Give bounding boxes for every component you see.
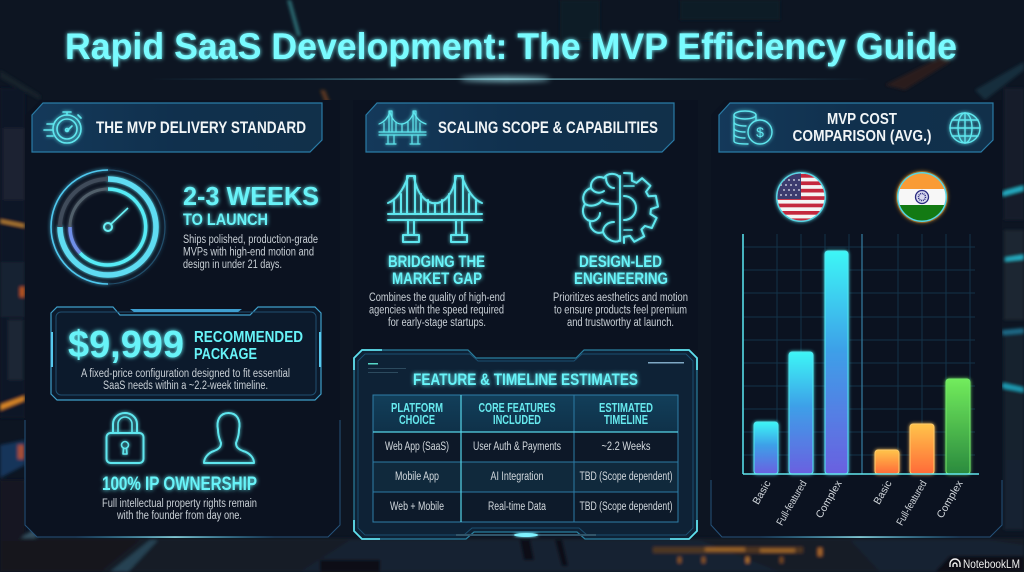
icon: USA flag [776, 172, 826, 222]
stat: 2-3 weeks to launch: MVPs with high-end motion and [183, 246, 314, 258]
feature: bridging the market gap: agencies with the speed required [369, 304, 504, 316]
table: feature and timeline estimates [373, 395, 678, 522]
table rows: Real-time Data [488, 501, 546, 513]
panel: feature and timeline estimates: FEATURE & TIMELINE ESTIMATES [413, 370, 638, 389]
table header: CHOICE [399, 413, 435, 427]
icon: person silhouette [204, 413, 254, 463]
feature: IP ownership: Full intellectual property rights remain [102, 498, 257, 510]
axis labels: Complex [813, 478, 845, 520]
icon: suspension bridge [388, 176, 482, 242]
stat: 2-3 weeks to launch: Ships polished, production-grade [183, 234, 318, 246]
icon: brain and gear [583, 173, 658, 243]
icon: small bridge [379, 111, 426, 144]
table rows [385, 441, 673, 513]
table header [391, 401, 653, 427]
table header: INCLUDED [493, 413, 541, 427]
axis labels [750, 478, 966, 528]
feature: bridging the market gap [369, 252, 505, 329]
section header: delivery standard [32, 103, 322, 152]
stat: 2-3 weeks to launch [183, 181, 319, 271]
callout: recommended package: RECOMMENDED [194, 329, 303, 346]
feature: design-led engineering: ENGINEERING [574, 269, 668, 288]
table rows: AI Integration [490, 471, 544, 483]
title: Rapid SaaS Development: The MVP Efficiency Guide [65, 26, 957, 67]
section header: cost comparison [719, 103, 993, 152]
icon: stopwatch [44, 112, 81, 143]
table rows: Web + Mobile [390, 501, 444, 513]
feature: IP ownership [102, 474, 257, 522]
table rows: TBD (Scope dependent) [580, 471, 673, 483]
table rows: ~2.2 Weeks [602, 441, 651, 453]
section header: scaling scope [366, 103, 674, 152]
icon: India flag [896, 171, 948, 223]
table header: ESTIMATED [599, 401, 653, 415]
feature: bridging the market gap: for early-stage startups. [388, 317, 486, 329]
callout: recommended package: PACKAGE [194, 346, 257, 363]
bar chart: cost by complexity [743, 234, 979, 528]
feature: design-led engineering [553, 252, 688, 329]
feature: design-led engineering: to ensure products feel premium [554, 304, 687, 316]
USA bars [754, 251, 848, 474]
axis labels: Complex [934, 478, 966, 520]
table header: TIMELINE [604, 413, 648, 427]
callout: recommended package: A fixed-price configuration designed to fit essential [81, 368, 290, 380]
panel: MVP cost comparison [711, 100, 1002, 538]
feature: bridging the market gap: Combines the quality of high-end [369, 292, 505, 304]
icon: padlock [106, 413, 144, 463]
section header: cost comparison: COMPARISON (AVG.) [792, 128, 932, 145]
bottom floor [0, 538, 1024, 572]
feature: design-led engineering: DESIGN-LED [579, 252, 662, 271]
axis labels: Basic [750, 478, 774, 507]
section header: delivery standard: THE MVP DELIVERY STANDARD [96, 119, 306, 137]
gauge dial icon [51, 170, 165, 284]
axis labels: Full-featured [894, 478, 930, 528]
callout: recommended package [51, 307, 321, 400]
section header: scaling scope: SCALING SCOPE & CAPABILITIES [438, 119, 658, 137]
icon: coins: $ [756, 124, 764, 140]
icon: coins [734, 111, 772, 144]
stat: 2-3 weeks to launch: TO LAUNCH [183, 210, 268, 229]
table rows: TBD (Scope dependent) [580, 501, 673, 513]
top structure [287, 0, 301, 36]
callout: recommended package: SaaS needs within a ~2.2-week timeline. [103, 380, 268, 392]
feature: IP ownership: 100% IP OWNERSHIP [102, 474, 257, 495]
table rows: Web App (SaaS) [385, 441, 449, 453]
feature: design-led engineering: Prioritizes aesthetics and motion [553, 292, 688, 304]
table header: PLATFORM [391, 401, 443, 415]
panel: the MVP delivery standard [25, 100, 340, 538]
axis labels: Full-featured [774, 478, 810, 528]
table rows: User Auth & Payments [473, 441, 561, 453]
stat: 2-3 weeks to launch: 2-3 WEEKS [183, 181, 319, 211]
icon: globe [950, 113, 980, 143]
feature: design-led engineering: and trustworthy at launch. [567, 317, 674, 329]
table rows: Mobile App [395, 471, 439, 483]
panel: feature and timeline estimates [354, 350, 697, 539]
table header: CORE FEATURES [478, 401, 556, 415]
India bars [875, 379, 970, 474]
feature: bridging the market gap: MARKET GAP [392, 269, 482, 288]
feature: IP ownership: with the founder from day one. [116, 510, 242, 522]
section header: cost comparison: MVP COST [827, 111, 897, 128]
axis labels: Basic [871, 478, 895, 507]
panel: scaling scope and capabilities [353, 100, 698, 350]
callout: recommended package: $9,999 [68, 324, 184, 366]
stat: 2-3 weeks to launch: design in under 21 days. [183, 259, 282, 271]
feature: bridging the market gap: BRIDGING THE [388, 252, 485, 271]
